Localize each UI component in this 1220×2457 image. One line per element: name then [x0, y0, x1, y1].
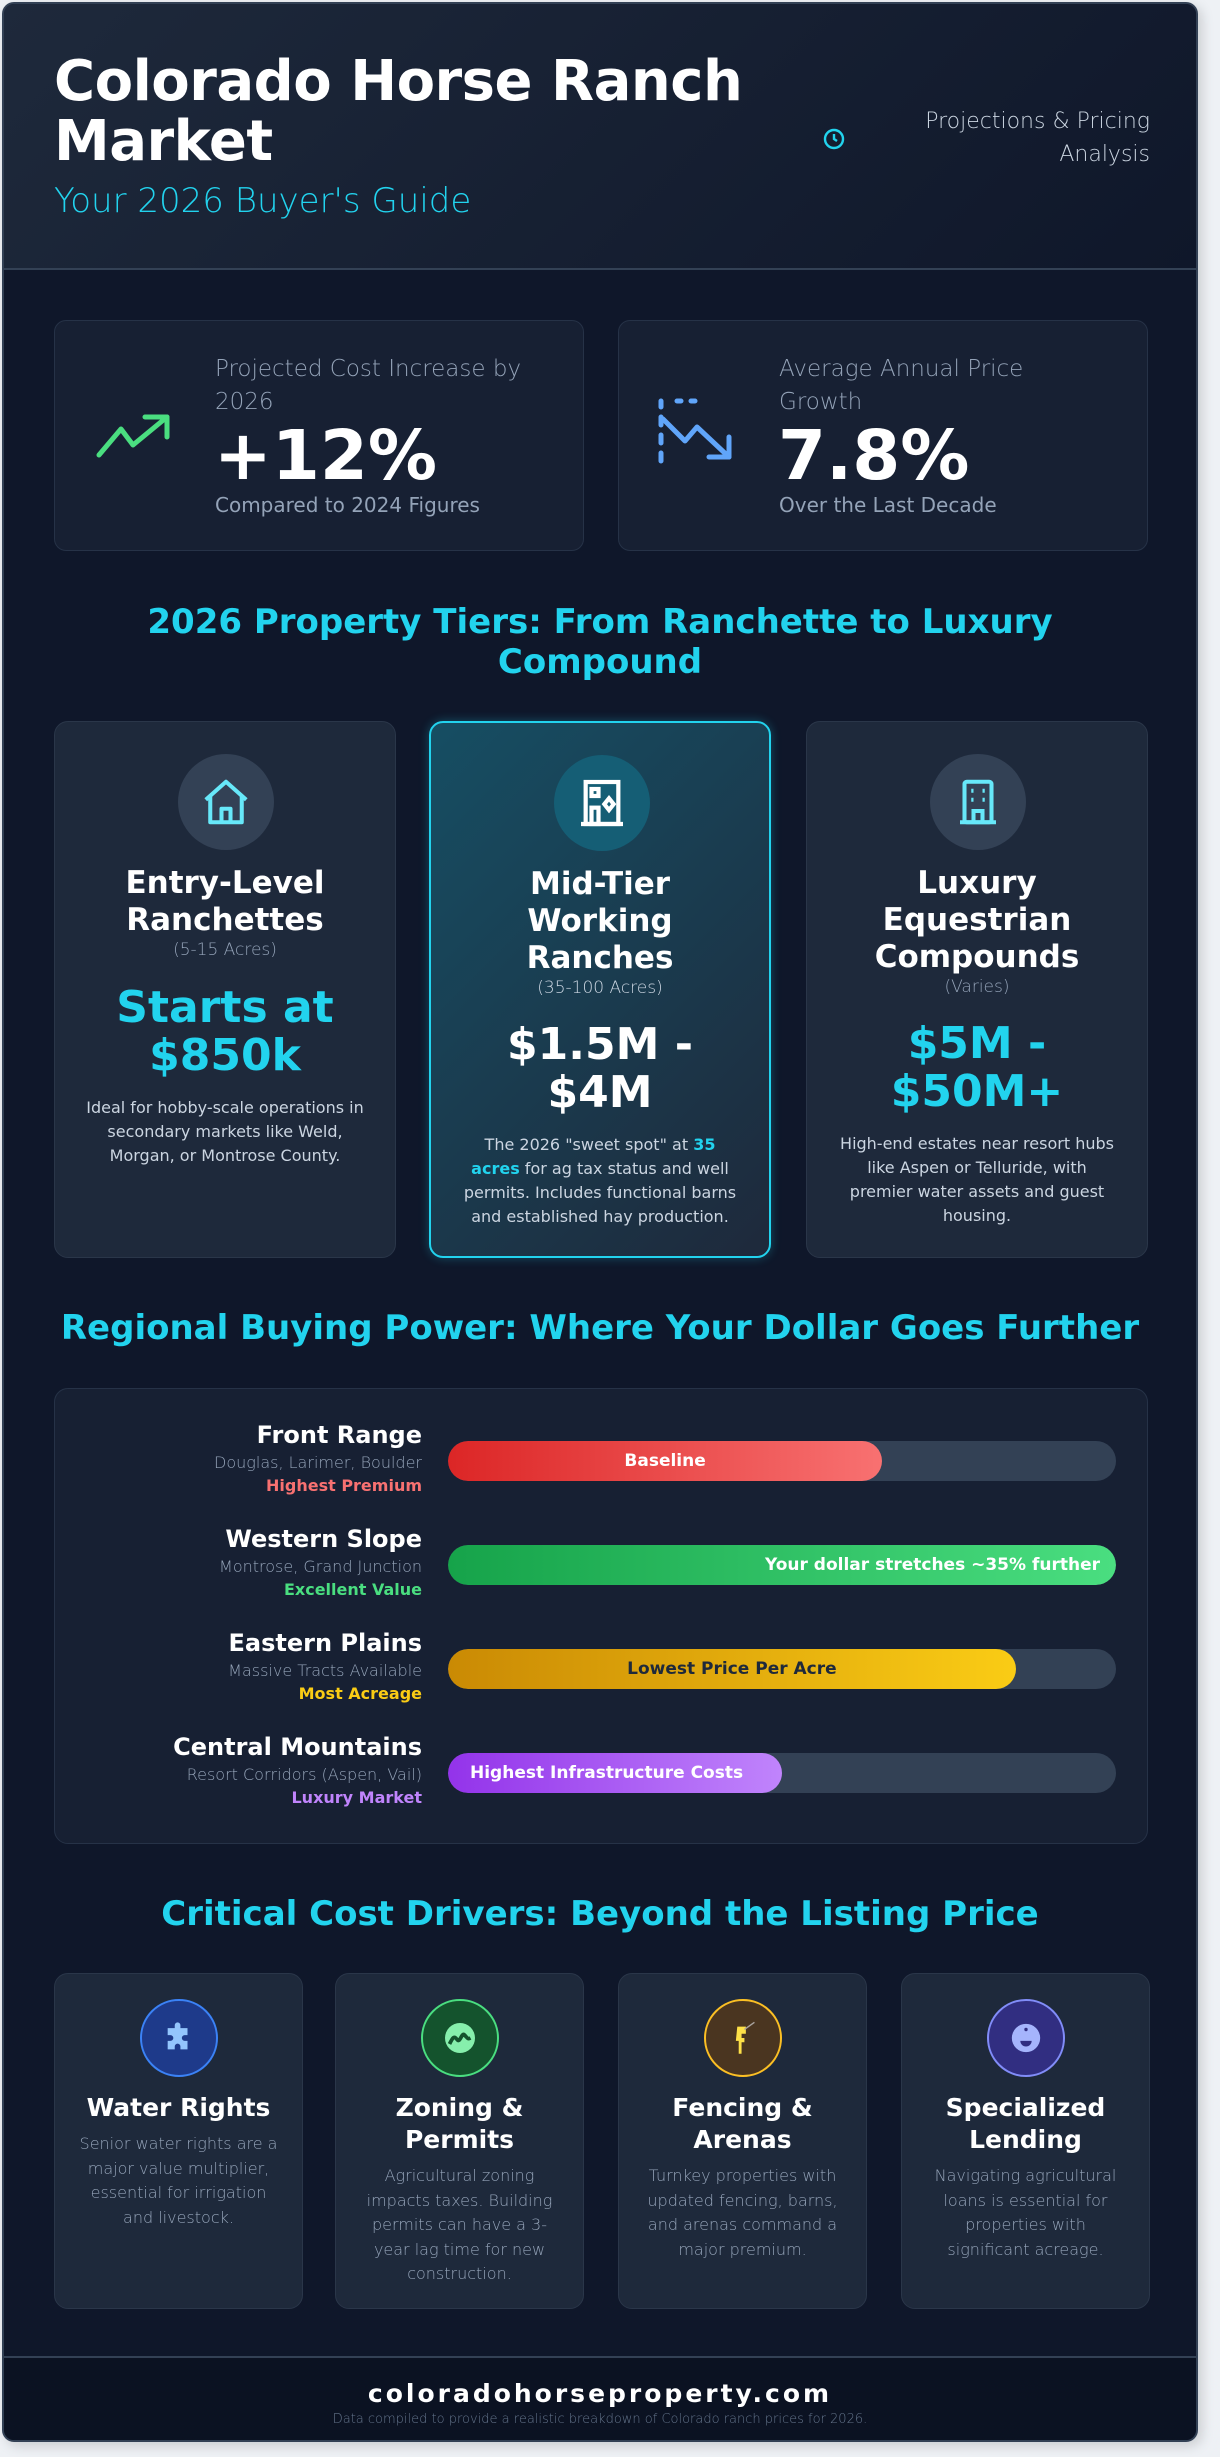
stat card: annual growth: Over the Last Decade — [779, 493, 997, 517]
row: eastern plains: Massive Tracts Available — [228, 1661, 422, 1680]
section heading: property tiers: 2026 Property Tiers: From Ranchette to Luxury — [147, 602, 1053, 642]
driver card: fencing: Arenas — [693, 2125, 792, 2154]
icon: trend up — [96, 414, 170, 458]
row: front range: Baseline — [624, 1451, 706, 1471]
tier card: entry: (5-15 Acres) — [173, 940, 277, 960]
driver card: zoning: Agricultural zoning impacts taxes. Building permits can have a 3-year lag time for new construction. — [367, 2166, 552, 2283]
icon: house — [178, 754, 274, 850]
tier card: mid (featured): (35-100 Acres) — [537, 978, 663, 998]
row: front range: Highest Premium — [266, 1476, 422, 1495]
panel: regional bars — [54, 1388, 1148, 1844]
footer note: Data compiled to provide a realistic breakdown of Colorado ranch prices for 2026. — [333, 2412, 867, 2427]
driver card: zoning — [335, 1973, 584, 2309]
tier card: mid (featured) — [429, 721, 771, 1258]
driver card: fencing: Turnkey properties with updated fencing, barns, and arenas command a major premium. — [647, 2166, 838, 2258]
row: western slope: Excellent Value — [284, 1580, 422, 1599]
icon: globe — [421, 1999, 499, 2077]
stat card: annual growth: Average Annual Price Growth — [779, 356, 1023, 415]
driver card: zoning: Permits — [405, 2125, 514, 2154]
header tagline — [925, 109, 1150, 167]
driver card: lending: Navigating agricultural loans is essential for properties with significant acreage. — [935, 2166, 1116, 2258]
tier card: luxury: $5M - — [908, 1018, 1046, 1069]
tier card: entry: Ideal for hobby-scale operations in secondary markets like Weld, Morgan, or Montrose County. — [86, 1098, 364, 1165]
tier card: mid (featured): Working — [527, 903, 673, 939]
driver card: water rights: Senior water rights are a major value multiplier, essential for irrigation and livestock. — [80, 2134, 277, 2226]
tier card: mid (featured): $4M — [547, 1067, 652, 1118]
icon: tower — [930, 754, 1026, 850]
row: central mountains: Central Mountains — [173, 1733, 422, 1761]
icon: face — [987, 1999, 1065, 2077]
stat card: annual growth: 7.8% — [778, 416, 969, 496]
row: eastern plains: Most Acreage — [299, 1684, 422, 1703]
row: western slope — [219, 1525, 1116, 1599]
driver card: zoning: Zoning & — [396, 2093, 523, 2122]
tier card: luxury — [806, 721, 1148, 1258]
row: front range: Douglas, Larimer, Boulder — [214, 1453, 422, 1472]
stat card: cost increase: Compared to 2024 Figures — [215, 493, 480, 517]
driver card: lending: Lending — [969, 2125, 1082, 2154]
tier card: entry: Entry-Level — [125, 865, 325, 901]
tier card: luxury: Compounds — [875, 939, 1079, 975]
section heading: cost drivers: Critical Cost Drivers: Beyond the Listing Price — [161, 1894, 1039, 1934]
driver card: fencing: Fencing & — [672, 2093, 813, 2122]
section heading: property tiers — [147, 602, 1053, 682]
row: western slope: Your dollar stretches ~35% further — [765, 1555, 1100, 1575]
tier card: luxury: Luxury — [917, 865, 1037, 901]
stat card: cost increase — [54, 320, 584, 551]
driver card: water rights: Water Rights — [87, 2093, 270, 2122]
icon: puzzle — [140, 1999, 218, 2077]
header — [4, 4, 1196, 270]
row: front range — [214, 1421, 1116, 1495]
row: central mountains: Luxury Market — [291, 1788, 422, 1807]
section heading: regional: Regional Buying Power: Where Your Dollar Goes Further — [61, 1308, 1139, 1348]
title: Market — [54, 109, 273, 174]
footer — [4, 2356, 1196, 2446]
stat card: cost increase: +12% — [214, 416, 437, 496]
row: central mountains: Highest Infrastructure Costs — [470, 1763, 743, 1783]
icon: hammer — [704, 1999, 782, 2077]
footer url: coloradohorseproperty.com — [368, 2379, 832, 2408]
row: western slope: Montrose, Grand Junction — [219, 1557, 422, 1576]
stat card: annual growth — [618, 320, 1148, 551]
title: Colorado Horse Ranch — [54, 49, 742, 114]
driver card: lending — [901, 1973, 1150, 2309]
driver card: water rights — [54, 1973, 303, 2309]
tier card: luxury: $50M+ — [891, 1066, 1063, 1117]
tier card: luxury: (Varies) — [944, 977, 1010, 997]
tier card: mid (featured): The 2026 "sweet spot" at 35 acres for ag tax status and well permits. Includes functional barns and established hay production. — [464, 1135, 736, 1226]
title — [54, 49, 742, 174]
tier card: luxury: Equestrian — [883, 902, 1071, 938]
tier card: mid (featured): $1.5M - — [507, 1019, 693, 1070]
row: central mountains — [173, 1733, 1116, 1807]
row: western slope: Western Slope — [225, 1525, 422, 1553]
driver card: fencing — [618, 1973, 867, 2309]
driver card: lending: Specialized — [946, 2093, 1105, 2122]
row: eastern plains: Eastern Plains — [228, 1629, 422, 1657]
tier card: entry: Ranchettes — [126, 902, 324, 938]
tier card: mid (featured): Mid-Tier — [530, 866, 670, 902]
row: central mountains: Resort Corridors (Aspen, Vail) — [187, 1765, 422, 1784]
header tagline: Projections & Pricing — [925, 109, 1150, 134]
row: eastern plains: Lowest Price Per Acre — [627, 1659, 837, 1679]
row: eastern plains — [228, 1629, 1116, 1703]
tier card: entry: $850k — [149, 1030, 301, 1081]
subtitle: Your 2026 Buyer's Guide — [54, 181, 471, 221]
row: front range: Front Range — [257, 1421, 422, 1449]
icon: chart line — [658, 398, 732, 464]
tier card: entry: Starts at — [116, 982, 334, 1033]
tier card: entry — [54, 721, 396, 1258]
header tagline: Analysis — [1059, 142, 1150, 167]
section heading: property tiers: Compound — [498, 642, 702, 682]
icon: clock — [824, 128, 844, 150]
tier card: mid (featured): Ranches — [527, 940, 673, 976]
stat card: cost increase: Projected Cost Increase by 2026 — [215, 356, 521, 415]
icon: building — [554, 755, 650, 851]
tier card: luxury: High-end estates near resort hubs like Aspen or Telluride, with premier water assets and guest housing. — [840, 1134, 1114, 1225]
